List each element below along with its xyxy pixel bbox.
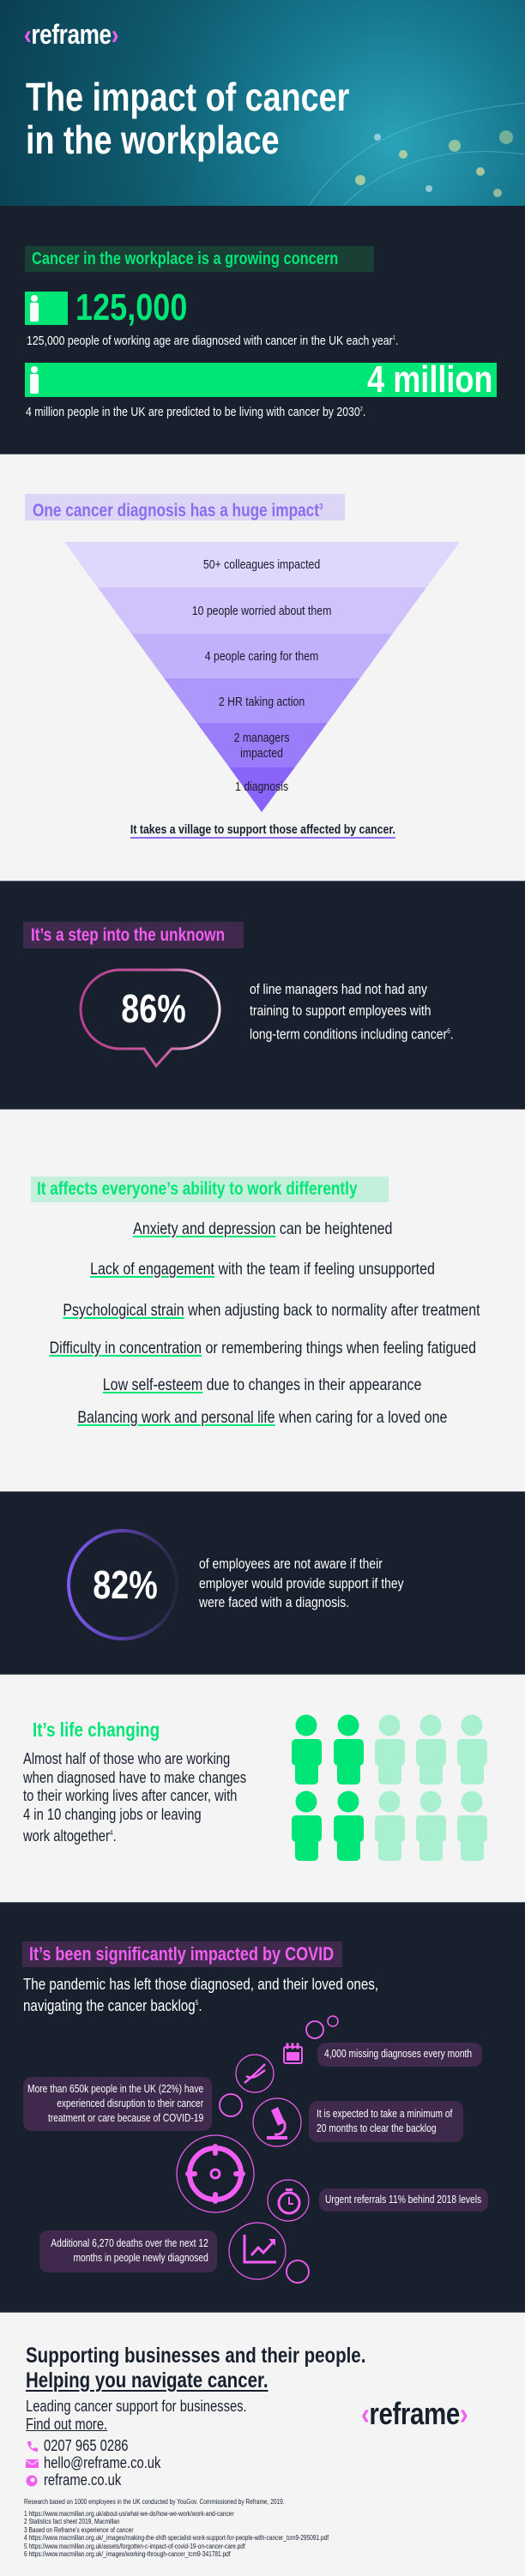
caption: village: It takes a village to support those affected by cancer. [130, 822, 395, 837]
paragraph [23, 1750, 246, 1845]
section: growing concern [0, 206, 525, 454]
section: one diagnosis heading [25, 494, 345, 521]
icon: person [25, 292, 68, 325]
tagline: Supporting businesses and their people. [26, 2344, 365, 2368]
number: 125,000 [75, 286, 187, 328]
funnel chart: 2 HR taking action [219, 695, 305, 708]
funnel chart: 2 managers [234, 731, 290, 744]
paragraph: work altogether4. [23, 1827, 117, 1845]
callout: 650k [23, 2077, 212, 2131]
callout: deaths: Additional 6,270 deaths over the next 12 [51, 2237, 208, 2249]
contacts: reframe.co.uk [44, 2471, 121, 2489]
contacts: 0207 965 0286 [44, 2437, 129, 2454]
references: 4 https://www.macmillan.org.uk/_images/making-the-shift-specialist-work-support-for-people-with-cancer_tcm9-295091.pdf [24, 2534, 329, 2542]
callout: urgent referrals [319, 2188, 488, 2212]
people icons [292, 1715, 487, 1861]
references: 3 Based on Reframe’s experience of cancer [24, 2526, 134, 2533]
callout: 650k: More than 650k people in the UK (22%) have [27, 2083, 203, 2095]
heading [23, 922, 244, 948]
callout: missing diagnoses [317, 2043, 482, 2067]
stat 4 million: 4 million [367, 358, 492, 400]
ring 82% [67, 1529, 178, 1640]
heading: Cancer in the workplace is a growing concern [32, 250, 338, 268]
list of effects: Balancing work and personal life when caring for a loved one [77, 1408, 448, 1427]
callout: missing diagnoses: 4,000 missing diagnoses every month [324, 2048, 472, 2060]
callout: 650k: experienced disruption to their cancer [57, 2098, 203, 2110]
list of effects: Anxiety and depression can be heightened [133, 1219, 392, 1238]
section: covid [0, 1902, 525, 2313]
tagline [26, 2344, 365, 2392]
funnel chart: impacted [240, 746, 283, 760]
text [199, 1556, 404, 1610]
funnel chart: 50+ colleagues impacted [203, 557, 320, 571]
text: of employees are not aware if their [199, 1556, 383, 1572]
speech bubble 86%: 86% [121, 986, 186, 1031]
callout: 650k: treatment or care because of COVID-19 [48, 2112, 203, 2124]
text: long-term conditions including cancer6. [250, 1026, 454, 1043]
title: in the workplace [26, 117, 280, 162]
caption: 125,000 people of working age are diagnosed with cancer in the UK each year1. [27, 334, 398, 348]
find out more: Find out more. [26, 2416, 107, 2433]
contacts [26, 2437, 161, 2489]
stat 4 million [25, 358, 497, 419]
heading: affects everyone [31, 1177, 389, 1202]
callout: 20 months [309, 2101, 463, 2142]
paragraph: Almost half of those who are working [23, 1750, 230, 1767]
list of effects: Low self-esteem due to changes in their appearance [103, 1375, 422, 1394]
list of effects: Psychological strain when adjusting back to normality after treatment [63, 1301, 480, 1320]
references: 1 https://www.macmillan.org.uk/about-us/what-we-do/how-we-work/work-and-cancer [24, 2509, 234, 2518]
references: Research based on 1000 employees in the UK conducted by YouGov. Commissioned by Reframe, 2019. [24, 2498, 285, 2506]
callout: deaths: months in people newly diagnosed [74, 2252, 208, 2264]
find out more: Leading cancer support for businesses. [26, 2398, 247, 2415]
text: employer would provide support if they [199, 1574, 404, 1592]
references: 2 Statistics fact sheet 2019, Macmillan [24, 2518, 120, 2525]
heading: affects everyone: It affects everyone’s ability to work differently [37, 1179, 358, 1199]
title [26, 75, 349, 162]
text: were faced with a diagnosis. [199, 1594, 349, 1610]
references: 6 https://www.macmillan.org.uk/_images/working-through-cancer_tcm9-341781.pdf [24, 2550, 231, 2558]
heading: It’s been significantly impacted by COVID [29, 1943, 334, 1965]
callout: deaths [39, 2230, 217, 2272]
header banner [0, 0, 525, 206]
intro: navigating the cancer backlog5. [23, 1996, 202, 2014]
heading [25, 246, 374, 272]
section: one diagnosis heading: One cancer diagnosis has a huge impact3 [33, 501, 323, 521]
list of effects: Lack of engagement with the team if feeling unsupported [90, 1260, 435, 1279]
funnel chart [64, 542, 460, 812]
intro [23, 1975, 378, 2014]
footer [24, 2344, 468, 2558]
section: life changing: It’s life changing [33, 1718, 160, 1741]
stat 125,000 [25, 286, 398, 348]
section: step into the unknown [0, 881, 525, 1110]
funnel chart: 10 people worried about them [192, 604, 331, 617]
paragraph: to their working lives after cancer, with [23, 1787, 237, 1804]
funnel chart: 1 diagnosis [235, 779, 288, 793]
paragraph: 4 in 10 changing jobs or leaving [23, 1806, 202, 1823]
list of effects: Difficulty in concentration or remembering things when feeling fatigued [49, 1339, 476, 1357]
logo: ‹reframe› [361, 2396, 468, 2431]
speech bubble 86% [79, 969, 221, 1068]
section: 82% [0, 1491, 525, 1675]
text: training to support employees with [250, 1002, 431, 1019]
references: 5 https://www.macmillan.org.uk/assets/forgotten-c-impact-of-covid-19-on-cancer-care.pdf [24, 2542, 245, 2550]
callout: urgent referrals: Urgent referrals 11% behind 2018 levels [325, 2194, 481, 2206]
references [24, 2498, 329, 2558]
tagline: Helping you navigate cancer. [26, 2368, 269, 2392]
ring 82%: 82% [93, 1562, 158, 1607]
find out more [26, 2398, 247, 2433]
icons cluster [176, 2015, 339, 2284]
list of effects [49, 1219, 480, 1427]
text [250, 981, 454, 1043]
callout: 20 months: It is expected to take a minimum of [317, 2108, 452, 2120]
title: The impact of cancer [26, 75, 349, 119]
funnel chart: 4 people caring for them [205, 649, 318, 663]
logo: ‹reframe› [24, 19, 118, 50]
callout: 20 months: 20 months to clear the backlog [317, 2122, 437, 2134]
contacts: hello@reframe.co.uk [44, 2454, 160, 2471]
heading: It’s a step into the unknown [31, 925, 225, 945]
stat 4 million: 4 million people in the UK are predicted to be living with cancer by 20302. [26, 405, 365, 419]
text: of line managers had not had any [250, 981, 427, 997]
paragraph: when diagnosed have to make changes [23, 1768, 246, 1785]
intro: The pandemic has left those diagnosed, and their loved ones, [23, 1975, 378, 1993]
